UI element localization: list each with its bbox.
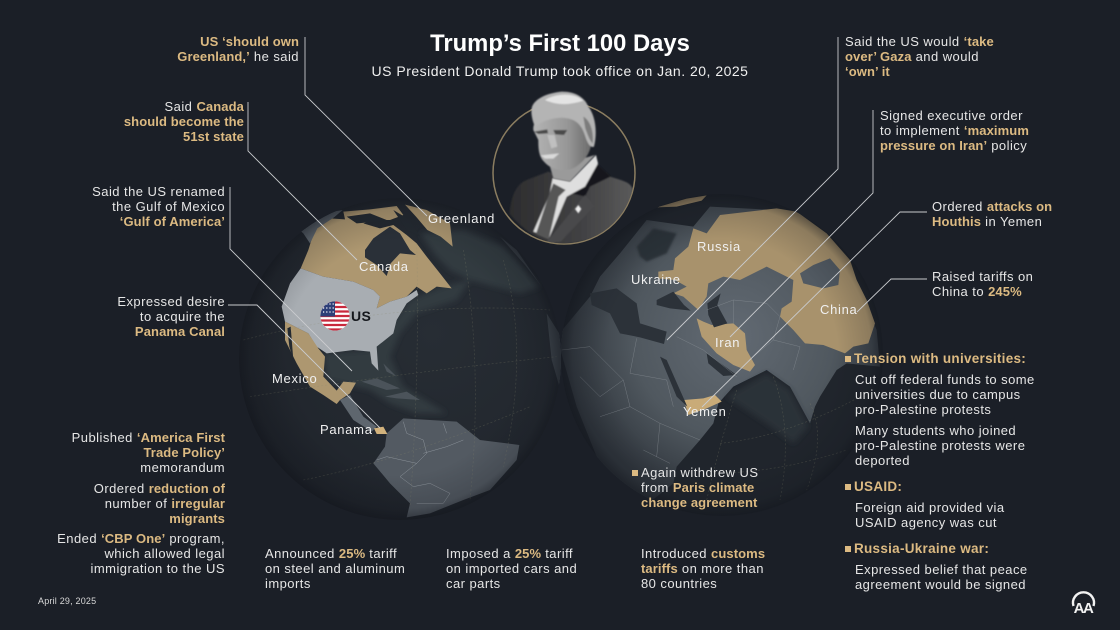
text: Panama Canal: Panama Canal [135, 324, 225, 339]
Central America [340, 395, 377, 432]
text: deported: pro-Palestine protests were [855, 438, 1025, 453]
lapel pin [575, 205, 581, 213]
label: US: US [351, 308, 371, 324]
South America borders [377, 422, 463, 503]
Africa and Asia borders [562, 300, 800, 463]
text: Gulf of America [92, 184, 225, 229]
text: deported [855, 423, 1025, 468]
label: Panama: Panama [320, 422, 373, 437]
Panama [374, 427, 387, 434]
text: USAID: USAID agency was cut [855, 515, 997, 530]
text: CBP One [57, 531, 225, 576]
Arctic channels [346, 210, 402, 224]
Yemen [684, 395, 722, 415]
US flag [320, 301, 350, 331]
text: Greenland: US ‘should own [200, 34, 299, 49]
text: customs tariffs: tariffs on more than [641, 561, 764, 576]
text: Canada [124, 99, 244, 144]
text: deported: Many students who joined [855, 423, 1016, 438]
text: Gaza: over’ Gaza and would [845, 49, 979, 64]
Russia and China [658, 208, 875, 353]
label: Greenland: Greenland [428, 211, 495, 226]
bullet [632, 470, 638, 476]
text: steel tariff: imports [265, 576, 311, 591]
text: Houthis: Ordered attacks on [932, 199, 1052, 214]
heading: USAID: USAID: [854, 479, 902, 494]
text: deported: deported [855, 453, 910, 468]
text: Iran: pressure on Iran’ policy [880, 138, 1027, 153]
text: Gulf of America: ‘Gulf of America’ [120, 214, 225, 229]
left globe: Americas [239, 198, 563, 520]
text: peace [855, 562, 1028, 592]
Alaska [300, 210, 343, 243]
text: USAID [855, 500, 1005, 530]
text: Paris agreement: from Paris climate [641, 480, 754, 495]
text: Gaza: ‘own’ it [845, 64, 890, 79]
text: CBP One: immigration to the US [91, 561, 225, 576]
Arctic Russia strip [657, 195, 707, 207]
title: Trump’s First 100 Days [430, 30, 690, 57]
bullet [845, 546, 851, 552]
heading: universities: Tension with universities: [854, 351, 1026, 366]
text: Iran: to implement ‘maximum [880, 123, 1029, 138]
bullet [845, 356, 851, 362]
text: irregular migrants: number of irregular [105, 496, 225, 511]
right globe: Europe, Africa, Asia [557, 194, 883, 516]
text: funding: universities due to campus [855, 387, 1021, 402]
graticule [707, 377, 860, 500]
far land: Europe and Africa limb [501, 238, 561, 384]
text: steel tariff [265, 546, 405, 591]
eyes [534, 129, 567, 135]
Eurasia and Africa land [557, 207, 880, 510]
label: Ukraine: Ukraine [631, 272, 681, 287]
text: Iran: Signed executive order [880, 108, 1023, 123]
text: funding [855, 372, 1035, 417]
suit [510, 172, 632, 244]
text: Panama Canal: Expressed desire [117, 294, 225, 309]
globes and map artwork [228, 37, 1096, 613]
continental shelf [323, 230, 540, 413]
AA logo: AA [1074, 600, 1094, 617]
text: China tariffs: Raised tariffs on [932, 269, 1033, 284]
text: funding: Cut off federal funds to some [855, 372, 1035, 387]
text: China tariffs [932, 269, 1033, 299]
Mexico [285, 322, 356, 404]
text: funding: pro-Palestine protests [855, 402, 991, 417]
text: car tariff [446, 546, 577, 591]
text: irregular migrants: migrants [169, 511, 225, 526]
text: Canada: Said Canada [165, 99, 244, 114]
label: China: China [820, 302, 857, 317]
United States [282, 268, 418, 371]
text: Greenland [177, 34, 299, 64]
date: April 29, 2025 [38, 596, 96, 606]
text: car tariff: car parts [446, 576, 501, 591]
text: Greenland: Greenland,’ he said [177, 49, 299, 64]
text: Paris agreement [641, 465, 758, 510]
text: Paris agreement: change agreement [641, 495, 757, 510]
text: Gulf of America: the Gulf of Mexico [112, 199, 225, 214]
face [533, 113, 591, 170]
Indian Ocean shelf [730, 375, 806, 441]
text: Panama Canal: to acquire the [140, 309, 225, 324]
text: irregular migrants: Ordered reduction of [94, 481, 225, 496]
Iran [697, 318, 755, 372]
text: car tariff: on imported cars and [446, 561, 577, 576]
text: peace: Expressed belief that peace [855, 562, 1028, 577]
shirt and tie [533, 155, 598, 237]
label: Mexico: Mexico [272, 371, 317, 386]
text: customs tariffs: 80 countries [641, 576, 717, 591]
AA logo [1073, 592, 1094, 617]
text: CBP One: Ended ‘CBP One’ program, [57, 531, 225, 546]
seas: Mediterranean, Black, Caspian, Red, Gulf [590, 288, 737, 407]
text: America First: memorandum [140, 460, 225, 475]
label: Iran: Iran [715, 335, 740, 350]
text: Panama Canal [117, 294, 225, 339]
Greenland [405, 205, 453, 247]
text: Canada: 51st state [183, 129, 244, 144]
heading: Russia-Ukraine: Russia-Ukraine war: [854, 541, 989, 556]
text: Gaza [845, 34, 994, 79]
Canada and Arctic [301, 206, 452, 308]
text: Houthis: Houthis in Yemen [932, 214, 1042, 229]
neck [550, 155, 595, 182]
text: customs tariffs: Introduced customs [641, 546, 765, 561]
text: China tariffs: China to 245% [932, 284, 1022, 299]
label: Yemen: Yemen [683, 404, 726, 419]
Hudson Bay [365, 227, 416, 276]
text: peace: agreement would be signed [855, 577, 1026, 592]
text: steel tariff: Announced 25% tariff [265, 546, 397, 561]
text: Canada: should become the [124, 114, 244, 129]
Mongolia [800, 258, 840, 288]
text: CBP One: which allowed legal [104, 546, 225, 561]
hair [531, 92, 596, 147]
text: Gaza: Said the US would ‘take [845, 34, 994, 49]
text: steel tariff: on steel and aluminum [265, 561, 405, 576]
Gulf of California [287, 326, 293, 356]
text: America First: Published ‘America First [72, 430, 225, 445]
leader lines [228, 37, 927, 428]
text: America First [72, 430, 225, 475]
text: America First: Trade Policy’ [143, 445, 225, 460]
text: USAID: Foreign aid provided via [855, 500, 1005, 515]
bullet [845, 484, 851, 490]
label: Canada: Canada [359, 259, 409, 274]
label: Russia: Russia [697, 239, 741, 254]
subtitle: US President Donald Trump took office on Jan. 20, 2025 [372, 63, 748, 79]
text: Paris agreement: Again withdrew US [641, 465, 758, 480]
graticule [243, 243, 557, 507]
text: irregular migrants [94, 481, 225, 526]
South America [373, 418, 519, 517]
text: car tariff: Imposed a 25% tariff [446, 546, 573, 561]
text: Gulf of America: Said the US renamed [92, 184, 225, 199]
Baltic and northern seas [637, 228, 677, 262]
portrait of Trump [493, 92, 635, 244]
text: Iran [880, 108, 1029, 153]
text: Houthis [932, 199, 1052, 229]
text: customs tariffs [641, 546, 765, 591]
Caribbean islands [362, 363, 420, 400]
